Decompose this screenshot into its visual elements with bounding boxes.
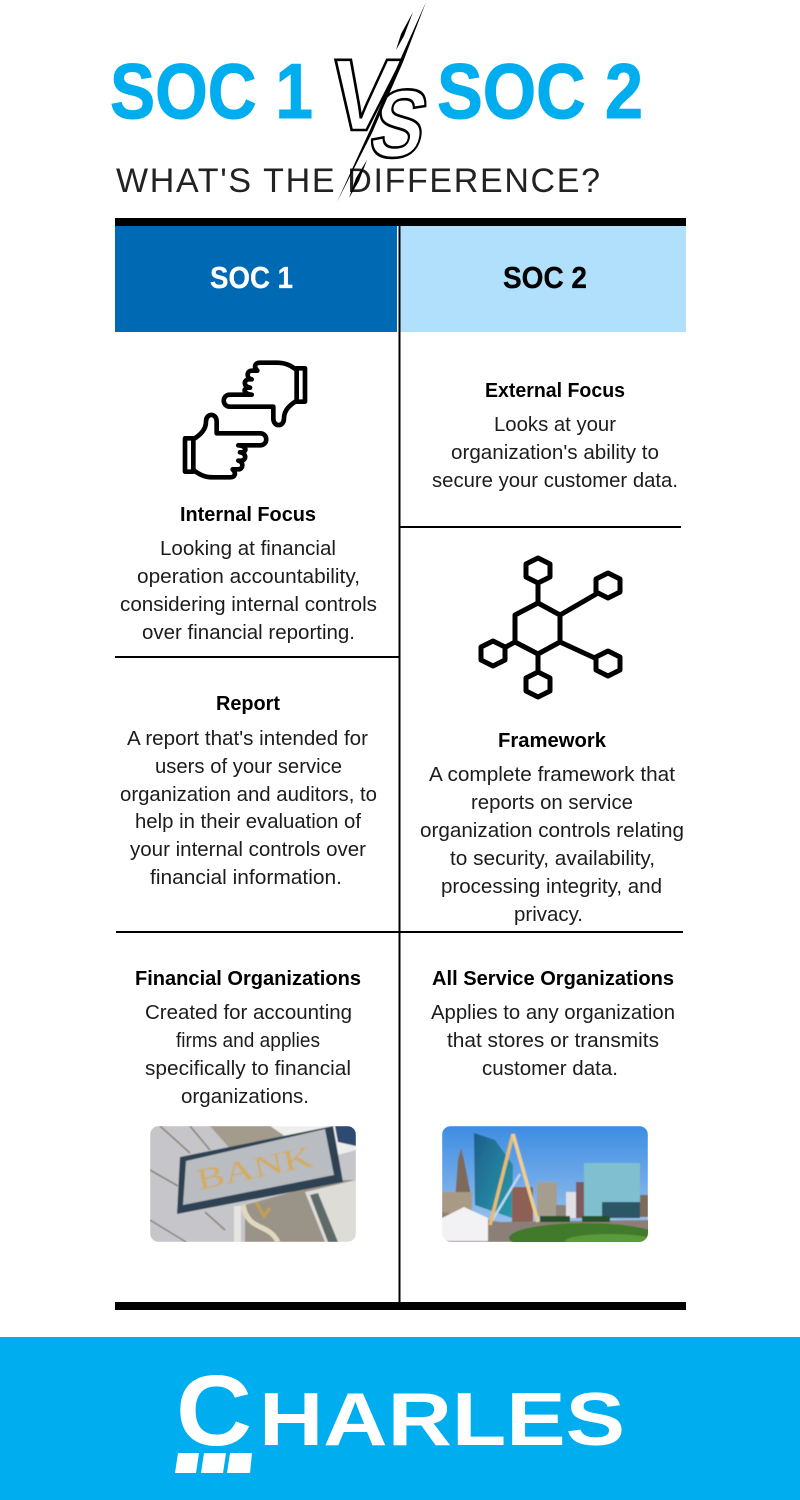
text: internal focus	[120, 503, 377, 644]
text: external focus	[432, 379, 678, 492]
subtitle: WHAT'S THE DIFFERENCE?	[116, 162, 600, 200]
text: report: help in their evaluation of	[135, 810, 361, 833]
text: framework: processing integrity, and	[441, 875, 662, 898]
text: framework: Framework	[498, 729, 607, 752]
panel: SOC 2 header: SOC 2	[503, 260, 587, 295]
text: internal focus: Internal Focus	[180, 503, 316, 526]
text: framework: organization controls relating	[420, 819, 684, 842]
text: financial organizations	[135, 967, 361, 1108]
text: all service organizations	[431, 967, 675, 1080]
panel: SOC 1 header: SOC 1	[210, 260, 293, 295]
footer band	[0, 1337, 800, 1500]
text: external focus: External Focus	[485, 379, 625, 402]
text: financial organizations: firms and applies	[176, 1029, 320, 1052]
logo: Charles: C	[176, 1355, 252, 1467]
text: financial organizations: specifically to financial	[145, 1057, 351, 1080]
logo: Charles	[175, 1355, 625, 1473]
text: financial organizations: Financial Organizations	[135, 967, 361, 990]
panel: SOC 1 header	[115, 226, 397, 332]
icon: VS slash emblem: V	[322, 37, 406, 152]
text: external focus: Looks at your	[494, 413, 616, 436]
text: report: A report that's intended for	[127, 727, 368, 750]
table bottom bar	[115, 1302, 686, 1310]
icon: hexagon network	[481, 558, 620, 697]
text: framework: to security, availability,	[450, 847, 655, 870]
text: financial organizations: organizations.	[181, 1085, 309, 1108]
icon: framing hands	[185, 363, 305, 477]
text: external focus: organization's ability to	[451, 441, 659, 464]
icon: VS slash emblem: S	[361, 71, 437, 179]
text: report: organization and auditors, to	[120, 783, 377, 806]
title: SOC 2: SOC 2	[437, 47, 643, 135]
text: report	[120, 692, 377, 889]
table top bar	[115, 218, 686, 226]
text: framework: reports on service	[471, 791, 633, 814]
text: all service organizations: Applies to any organization	[431, 1001, 675, 1024]
text: all service organizations: All Service Organizations	[432, 967, 674, 990]
text: report: users of your service	[155, 755, 342, 778]
text: framework: A complete framework that	[429, 763, 675, 786]
icon: VS slash emblem	[322, 2, 437, 202]
text: all service organizations: customer data.	[482, 1057, 618, 1080]
logo: Charles: HARLES	[259, 1377, 625, 1461]
text: report: Report	[216, 692, 280, 715]
text: all service organizations: that stores or transmits	[447, 1029, 659, 1052]
photo: city skyline	[442, 1126, 648, 1242]
text: financial organizations: Created for accounting	[145, 1001, 352, 1024]
text: internal focus: considering internal controls	[120, 593, 377, 616]
panel: SOC 2 header	[399, 226, 686, 332]
title: SOC 1: SOC 1	[110, 47, 313, 135]
photo: bank sign	[150, 1126, 356, 1242]
text: internal focus: over financial reporting.	[142, 621, 355, 644]
text: report: your internal controls over	[130, 838, 366, 861]
text: external focus: secure your customer data.	[432, 469, 678, 492]
text: internal focus: operation accountability,	[137, 565, 360, 588]
text: framework: privacy.	[514, 903, 583, 926]
text: internal focus: Looking at financial	[160, 537, 336, 560]
text: framework	[420, 729, 684, 926]
text: report: financial information.	[150, 866, 342, 889]
sign lettering: BANK	[194, 1140, 316, 1197]
